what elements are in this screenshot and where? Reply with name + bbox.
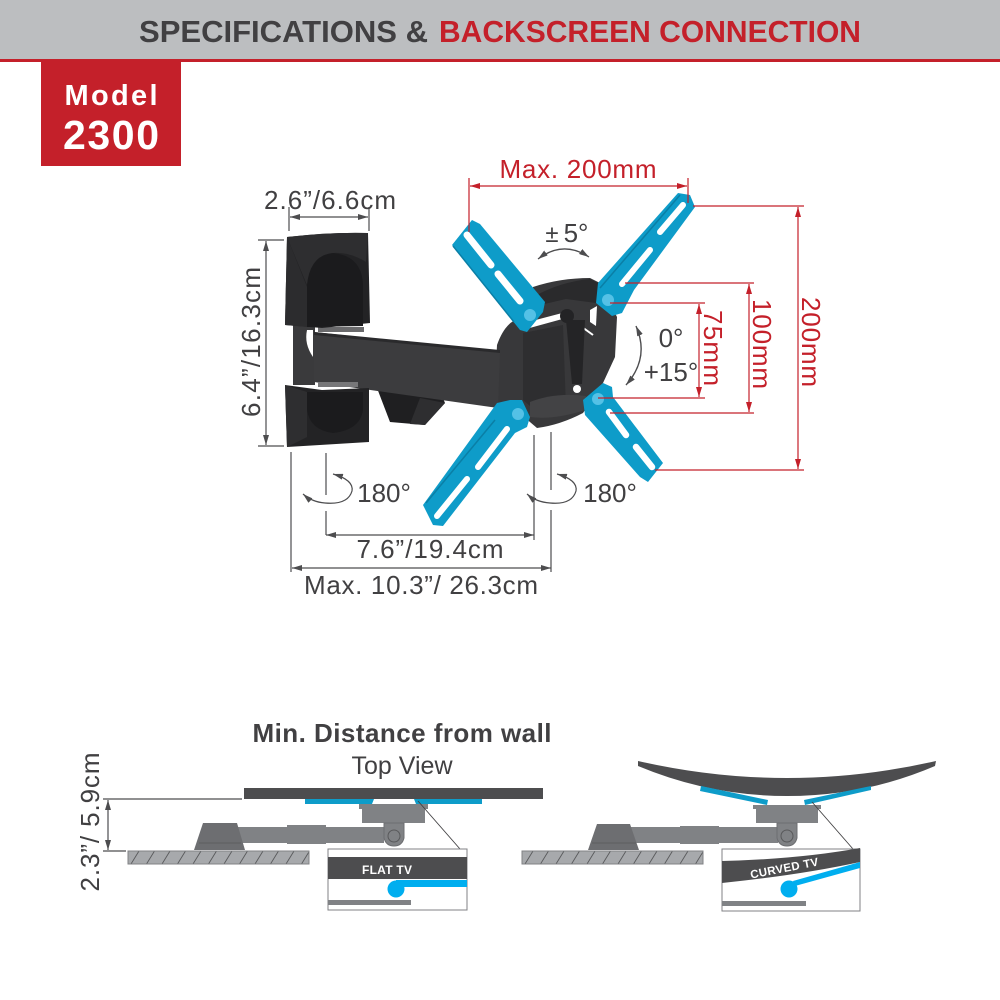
wall — [522, 851, 703, 864]
dimension: bracket width 2.6in: 2.6”/6.6cm — [264, 185, 396, 215]
heading: min distance from wall: Min. Distance from wall — [252, 718, 552, 748]
rotation right 180 degrees — [527, 432, 637, 572]
rotation right 180 degrees: 180° — [583, 478, 637, 508]
arm — [314, 332, 500, 408]
detail inset flat TV — [328, 849, 467, 910]
wall mount arm — [285, 233, 617, 447]
tilt label 0 to +15 degrees — [626, 323, 698, 387]
dimension: 200mm height: 200mm — [796, 297, 826, 387]
dimension: 75mm height: 75mm — [698, 310, 728, 386]
header band — [0, 0, 1000, 62]
arm top left — [452, 220, 545, 332]
blue VESA arms — [423, 193, 695, 526]
tilt label 0 to +15 degrees: +15° — [644, 357, 698, 387]
rear bracket back plate — [293, 325, 315, 385]
rotation left 180 degrees — [303, 453, 411, 535]
dimension: max 200mm width — [469, 154, 688, 232]
arm top right — [596, 193, 695, 316]
curved TV top view diagram — [522, 761, 936, 911]
rotation left 180 degrees: 180° — [357, 478, 411, 508]
rotation label +-5 degrees — [538, 218, 589, 259]
dimension: 7.6in: 7.6”/19.4cm — [356, 534, 504, 564]
dimension: 100mm height: 100mm — [747, 299, 777, 389]
tilt label 0 to +15 degrees: 0° — [659, 323, 683, 353]
rotation label +-5 degrees: ± — [545, 221, 559, 248]
dimension: 200mm height — [655, 206, 826, 470]
lower wall block — [285, 385, 369, 447]
arm bottom left — [423, 400, 530, 526]
dimension: 100mm height — [610, 283, 777, 413]
wall — [128, 851, 309, 864]
curved TV panel — [638, 761, 936, 796]
dimension: max 10.3in: Max. 10.3”/ 26.3cm — [304, 570, 538, 600]
subheading: top view: Top View — [352, 752, 453, 780]
leader line — [418, 801, 460, 849]
upper wall block — [285, 233, 370, 328]
lower support block — [377, 388, 445, 425]
arm — [630, 826, 778, 844]
dimension: 75mm height — [598, 303, 728, 398]
dimension: max 200mm width: Max. 200mm — [500, 154, 656, 184]
dimension: bracket height 6.4in — [236, 240, 284, 446]
hinge rings — [318, 327, 364, 332]
detail inset flat TV: FLAT TV — [362, 863, 412, 877]
model badge: 2300 — [63, 112, 159, 158]
flat TV top view diagram — [75, 752, 543, 910]
title — [139, 14, 861, 49]
arm — [235, 825, 384, 844]
dimension: 2.3in distance: 2.3”/ 5.9cm — [75, 752, 105, 892]
title: SPECIFICATIONS & — [139, 14, 428, 49]
detail inset curved TV: CURVED TV — [749, 857, 820, 882]
rotation label +-5 degrees: 5° — [564, 218, 588, 248]
model badge — [41, 62, 181, 166]
arm bottom right — [583, 383, 663, 482]
blue plates — [305, 799, 482, 804]
head — [359, 804, 428, 809]
blue plates — [700, 786, 871, 805]
flat TV panel — [244, 788, 543, 799]
dimension: bracket width 2.6in — [264, 185, 396, 231]
head — [753, 805, 821, 809]
leader line — [812, 802, 853, 849]
dimension: 2.3in distance — [75, 752, 242, 892]
tilt head body — [495, 278, 617, 428]
title: BACKSCREEN CONNECTION — [439, 14, 861, 49]
dimension: bracket height 6.4in: 6.4”/16.3cm — [236, 267, 266, 417]
model badge: Model — [64, 80, 158, 112]
detail inset curved TV — [722, 848, 860, 911]
